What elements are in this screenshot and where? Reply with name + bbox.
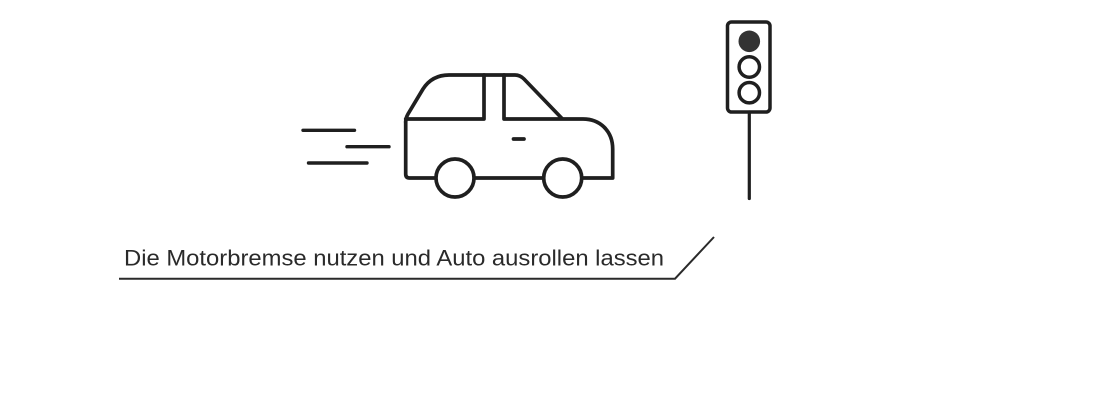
icon: speed lines (303, 130, 389, 163)
caption text: Die Motorbremse nutzen und Auto ausrollen lassen (124, 246, 664, 270)
icon: moving car (406, 75, 613, 197)
icon: traffic light (728, 22, 770, 198)
caption underline with angled end (119, 237, 714, 279)
